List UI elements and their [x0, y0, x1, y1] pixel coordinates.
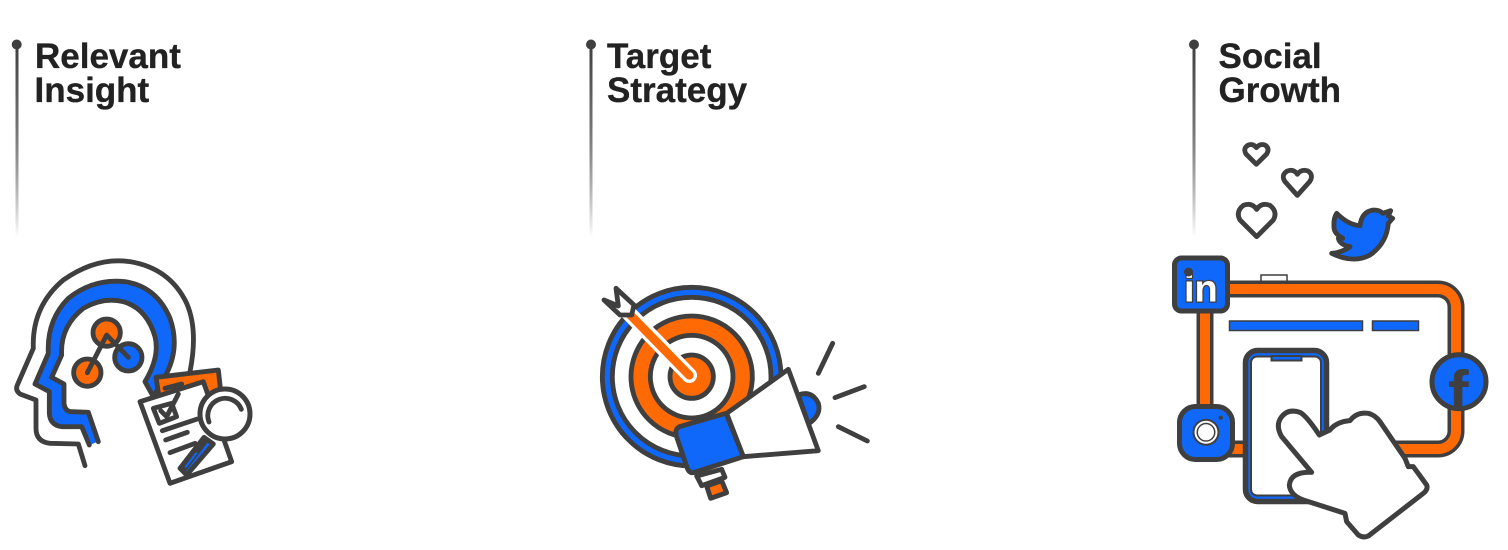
head outer outline — [17, 261, 193, 466]
heading: target strategy: Strategy — [607, 71, 748, 110]
orange folder — [156, 370, 222, 403]
heading: social growth — [1218, 37, 1341, 110]
icon: head with nodes and document — [17, 261, 250, 483]
timeline marker 3 — [1189, 40, 1199, 237]
icon: heart small — [1245, 145, 1268, 164]
panel: relevant insight — [12, 37, 250, 483]
megaphone handle — [697, 469, 727, 498]
heading: target strategy: Target — [607, 37, 712, 76]
heading: target strategy — [607, 37, 748, 110]
icon: facebook badge: f — [1448, 359, 1469, 428]
target rings — [602, 287, 781, 466]
megaphone body — [676, 413, 743, 473]
sound rays — [818, 343, 867, 441]
timeline marker 2 — [586, 40, 596, 237]
heading: relevant insight — [34, 37, 181, 110]
icon: facebook badge — [1430, 352, 1488, 412]
icon: linkedin badge — [1174, 258, 1228, 311]
icon: linkedin badge: in — [1184, 268, 1218, 310]
icon: smartphone — [1246, 350, 1326, 502]
magnifying glass — [180, 389, 250, 475]
panel: target strategy — [586, 37, 867, 498]
arrow — [604, 288, 689, 375]
timeline marker 1 — [12, 40, 22, 237]
icon: target and megaphone — [602, 287, 867, 498]
screen frame — [1205, 289, 1456, 449]
icon: heart medium — [1283, 170, 1311, 195]
screen frame tab — [1261, 275, 1287, 282]
heading: social growth: Social — [1218, 37, 1322, 76]
megaphone cone — [727, 369, 818, 457]
heading: relevant insight: Insight — [34, 71, 150, 110]
network nodes — [74, 319, 142, 386]
megaphone back dome — [798, 394, 819, 424]
icon: pointing hand — [1278, 411, 1427, 537]
heading: social growth: Growth — [1218, 71, 1341, 110]
head blue band — [35, 281, 174, 445]
paper with checklist — [140, 382, 232, 483]
icon: heart large — [1238, 204, 1275, 237]
panel: social growth — [1174, 37, 1486, 537]
icon: instagram badge — [1180, 406, 1232, 460]
heading: relevant insight: Relevant — [35, 37, 181, 76]
screen bars — [1230, 321, 1418, 330]
icon: twitter bird — [1332, 210, 1393, 259]
